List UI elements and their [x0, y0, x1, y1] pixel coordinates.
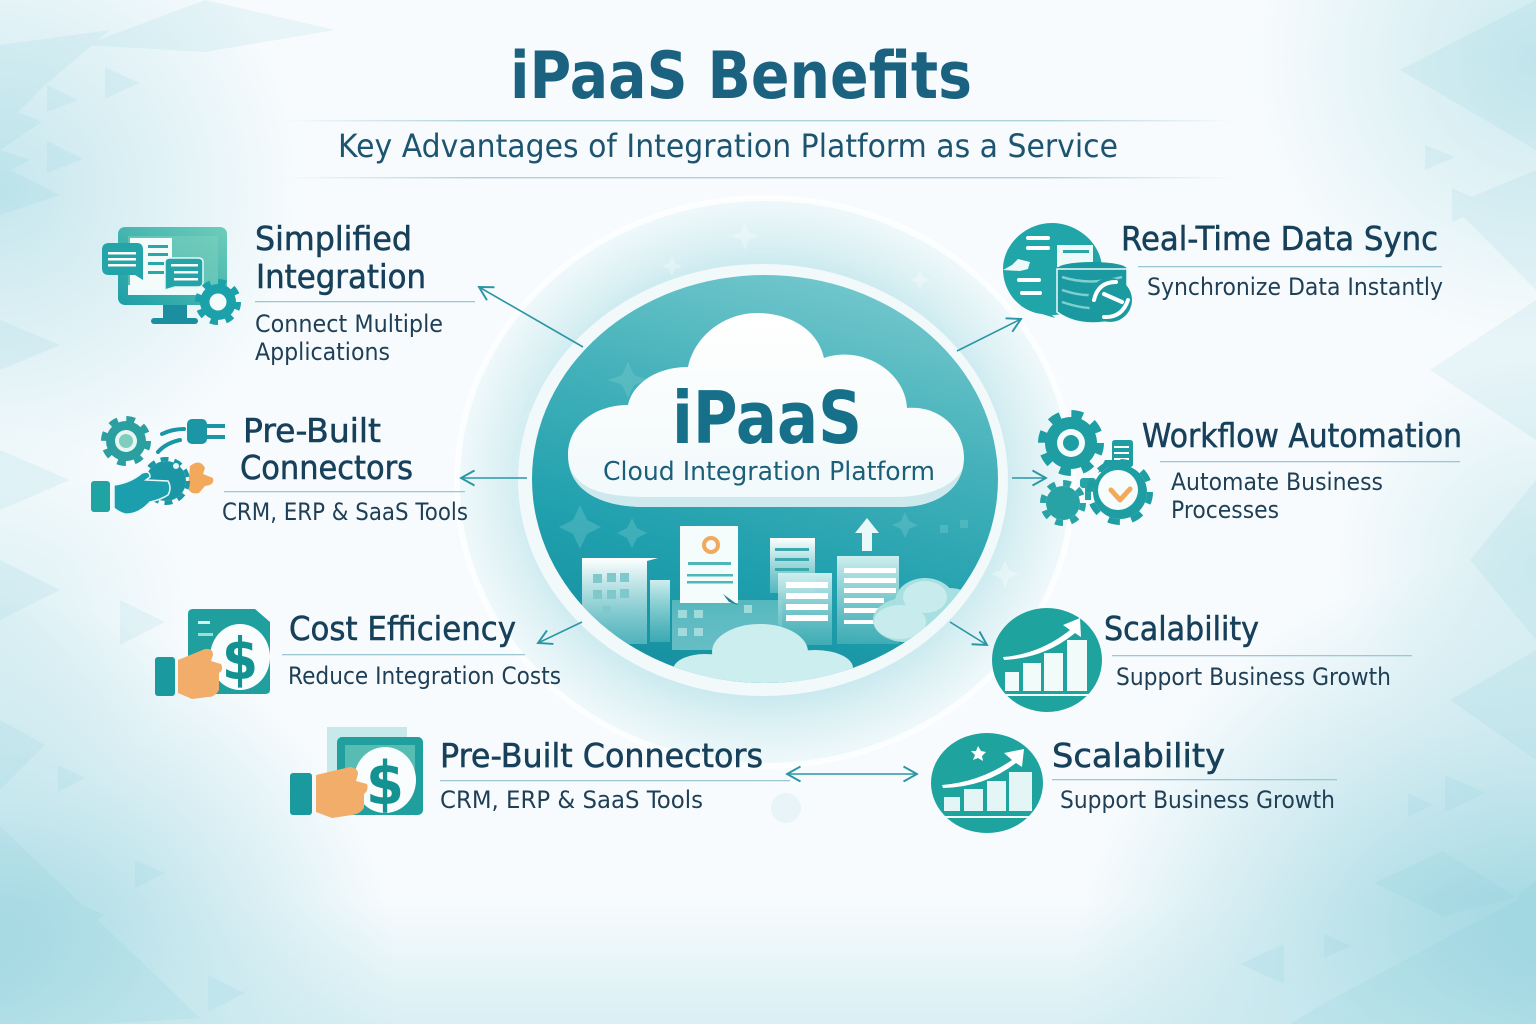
benefit: real-time data sync: [1003, 219, 1443, 323]
description line 2: Processes: [1171, 496, 1279, 524]
arrow: to scalability: [950, 622, 987, 645]
rule above subtitle: [285, 120, 1235, 121]
arrow: to pre-built connectors: [461, 477, 527, 479]
heading: Cost Efficiency: [289, 609, 516, 648]
icon: hand with dollar: $: [222, 625, 258, 693]
heading line 2: Connectors: [240, 448, 413, 487]
disc sparkles: [559, 362, 968, 549]
divider: [255, 301, 475, 302]
heading: Real-Time Data Sync: [1121, 219, 1438, 258]
heading: Pre-Built Connectors: [440, 736, 763, 775]
heading: Pre-Built: [243, 411, 381, 450]
outer halo: [457, 198, 1073, 766]
hub title: iPaaS: [672, 376, 862, 460]
cloud: [568, 313, 964, 507]
skyline illustration: [582, 518, 960, 683]
halo sparkles: [526, 222, 1019, 588]
description: Automate Business: [1171, 468, 1383, 496]
halo arc: [457, 198, 1073, 766]
white ring: [518, 264, 1008, 696]
description: Support Business Growth: [1060, 786, 1335, 814]
teal disc: [532, 275, 998, 683]
icon: gears, document and check: [1042, 414, 1150, 523]
description: Support Business Growth: [1116, 663, 1391, 691]
divider: [1160, 461, 1460, 462]
icon: growth chart with star: [931, 733, 1043, 833]
divider: [1112, 655, 1412, 656]
arrow: to simplified integration: [479, 287, 583, 347]
benefit: simplified integration: [102, 219, 475, 366]
benefit: workflow automation: [1042, 414, 1462, 524]
divider: [440, 780, 790, 781]
icon: monitor with gear: [102, 227, 238, 324]
heading: Simplified: [255, 219, 412, 258]
heading: Scalability: [1052, 736, 1225, 775]
divider: [1052, 779, 1337, 780]
divider: [224, 491, 465, 492]
central hub: [457, 198, 1073, 766]
heading line 2: Integration: [256, 257, 426, 296]
arrow: to cost efficiency: [538, 622, 582, 643]
benefit: cost efficiency: [155, 609, 561, 699]
benefit: pre-built connectors (bottom): [290, 727, 790, 819]
title: iPaaS Benefits: [510, 39, 972, 114]
arrow: to real-time data sync: [957, 319, 1021, 351]
icon: gear, plug and hand: [91, 419, 225, 514]
benefit: scalability (upper): [992, 608, 1412, 712]
icon: hand with dollar: [290, 727, 423, 819]
divider: [1138, 266, 1442, 267]
description: Synchronize Data Instantly: [1147, 273, 1443, 301]
benefit: pre-built connectors (left): [91, 411, 468, 526]
arrow: to workflow automation: [1012, 477, 1046, 479]
description: Connect Multiple: [255, 310, 443, 338]
faint swirl: [771, 793, 801, 823]
description line 2: Applications: [255, 338, 390, 366]
description: CRM, ERP & SaaS Tools: [222, 498, 468, 526]
heading: Scalability: [1104, 609, 1259, 648]
description: Reduce Integration Costs: [288, 662, 561, 690]
subtitle: Key Advantages of Integration Platform as a Service: [338, 127, 1118, 165]
icon: chat bubble, database and sync: [1003, 223, 1132, 323]
description: CRM, ERP & SaaS Tools: [440, 786, 703, 814]
icon: growth chart: [992, 608, 1102, 712]
icon: hand with dollar: [155, 609, 270, 699]
heading: Workflow Automation: [1142, 416, 1462, 455]
benefit: scalability (lower): [931, 733, 1337, 833]
icon: hand with dollar: $: [366, 749, 404, 819]
double arrow: [787, 773, 917, 775]
rule below subtitle: [285, 177, 1235, 178]
divider: [282, 654, 525, 655]
hub subtitle: Cloud Integration Platform: [603, 457, 935, 487]
